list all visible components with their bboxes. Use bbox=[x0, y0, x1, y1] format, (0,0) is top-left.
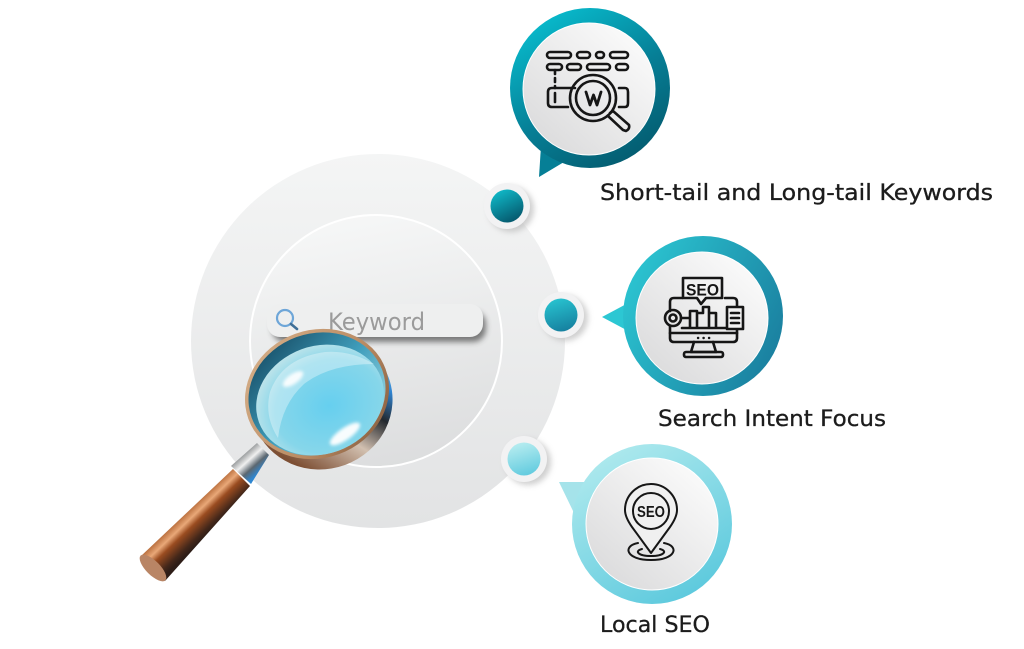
icon text: SEO: SEO bbox=[686, 280, 719, 300]
wooden handle bbox=[141, 469, 250, 581]
icon: SEO monitor bbox=[665, 278, 743, 357]
icon: search bbox=[277, 310, 297, 329]
bubble 1: short-tail and long-tail keywords bbox=[510, 8, 670, 177]
background disc bbox=[191, 154, 565, 528]
bubble 3: local SEO bbox=[559, 444, 732, 604]
connector dot 1 bbox=[484, 183, 534, 232]
icon: location pin bbox=[625, 484, 677, 560]
lens highlights bbox=[268, 352, 374, 449]
lens body side bbox=[232, 315, 412, 489]
search keyword text: Keyword bbox=[328, 308, 425, 336]
inner disc bbox=[250, 215, 502, 467]
connector dot 3 bbox=[501, 436, 551, 485]
icon: keyword search bbox=[547, 52, 629, 131]
lens rim bbox=[227, 309, 407, 479]
label: local SEO: Local SEO bbox=[600, 613, 710, 638]
handle neck bbox=[231, 443, 269, 484]
magnifying glass bbox=[136, 309, 412, 585]
label: search intent focus: Search Intent Focus bbox=[658, 407, 886, 432]
search bar bbox=[267, 304, 486, 342]
connector dot 2 bbox=[538, 292, 588, 341]
handle end cap bbox=[136, 551, 170, 585]
lens glass bbox=[240, 327, 400, 473]
label: short-tail and long-tail keywords: Short-tail and Long-tail Keywords bbox=[600, 181, 993, 206]
bubble 2: search intent focus bbox=[602, 236, 783, 396]
icon text: SEO: SEO bbox=[637, 504, 665, 521]
